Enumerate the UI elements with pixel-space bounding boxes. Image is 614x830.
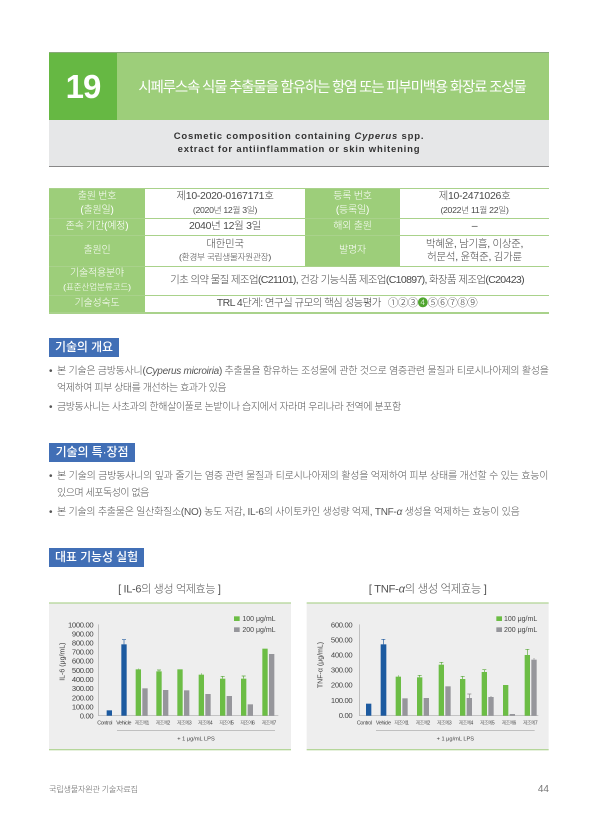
chart: IL-6: 700.00 (72, 648, 93, 657)
filing number label: 출원 번호 (78, 191, 116, 202)
registration number: (2022년 11월 22일) (440, 204, 509, 214)
applicant label: 출원인 (84, 245, 110, 256)
overseas label: 해외 출원 (333, 221, 372, 232)
chart: IL-6: 제조예7 (262, 720, 277, 727)
chart: TNF-alpha: 제조예3 (437, 720, 452, 727)
chart: IL-6: 200 μg/mL (242, 627, 276, 634)
chart: IL-6: 0.00 (80, 711, 93, 720)
term label (49, 219, 145, 235)
chart: IL-6: IL-6 (μg/mL) (59, 643, 66, 681)
chart: IL-6: 500.00 (72, 666, 93, 675)
field (145, 267, 549, 295)
chart: TNF-alpha: 200 μg/mL (504, 627, 537, 634)
chart: TNF-alpha: + 1 μg/mL LPS (437, 737, 474, 743)
maturity label: 기술성숙도 (74, 298, 120, 309)
maturity: TRL 4단계: 연구실 규모의 핵심 성능평가 ①②③❹⑤⑥⑦⑧⑨ (217, 297, 477, 309)
term (145, 219, 305, 235)
chart: TNF-alpha: [ TNF-α의 생성 억제효능 ] (369, 583, 487, 596)
registration number label: (등록일) (336, 204, 369, 216)
chart: IL-6: 1000.00 (68, 620, 93, 629)
chart: IL-6: 100 μg/mL (242, 616, 276, 623)
heading: overview: 기술의 개요 (55, 340, 113, 354)
chart: IL-6: 제조예5 (219, 720, 234, 727)
heading: experiments (49, 548, 144, 567)
chart: TNF-alpha: 300.00 (331, 666, 352, 675)
chart: TNF-alpha: 제조예5 (480, 720, 495, 727)
registration number: 제10-2471026호 (439, 190, 510, 202)
features text: • (49, 507, 52, 518)
term: 2040년 12월 3일 (189, 220, 261, 232)
features text (49, 470, 548, 518)
overseas label (305, 219, 400, 235)
inventors: 박혜윤, 남기흠, 이상준, (426, 238, 523, 250)
page number: 44 (538, 784, 549, 795)
chart: TNF-alpha: 제조예2 (416, 720, 431, 727)
inventors (400, 236, 549, 266)
heading: features (49, 443, 135, 462)
overview text: • (49, 402, 52, 413)
chart: IL-6: 900.00 (72, 629, 93, 638)
applicant (145, 236, 305, 266)
field: 기초 의약 물질 제조업(C21101), 건강 기능식품 제조업(C10897), 화장품 제조업(C20423) (170, 274, 524, 286)
english title: Cosmetic composition containing Cyperus spp. (174, 131, 424, 142)
chart: IL-6: 800.00 (72, 638, 93, 647)
chart: TNF-alpha: 400.00 (331, 651, 352, 660)
applicant label (49, 236, 145, 266)
registration number (400, 189, 549, 218)
chart: IL-6: 200.00 (72, 693, 93, 702)
features line 1: 본 기술의 금방동사니의 잎과 줄기는 염증 관련 물질과 티로시나아제의 활성을 억제하여 피부 상태를 개선할 수 있는 효능이 (57, 471, 548, 482)
overseas (400, 219, 549, 235)
chart: IL-6: 제조예3 (177, 720, 192, 727)
chart: IL-6: 300.00 (72, 684, 93, 693)
features line 2: 있으며 세포독성이 없음 (57, 488, 149, 499)
chart: IL-6 (49, 583, 291, 750)
filing number label (49, 189, 145, 218)
overview line 1: 본 기술은 금방동사니(Cyperus microiria) 추출물을 함유하는 조성물에 관한 것으로 염증관련 물질과 티로시나아제의 활성을 (57, 366, 549, 377)
term label: 존속 기간(예정) (66, 221, 128, 232)
chart: TNF-alpha: Vehicle (376, 721, 391, 727)
chart: IL-6: 제조예1 (135, 720, 150, 727)
chart: IL-6: Vehicle (116, 721, 131, 727)
chart: TNF-alpha: TNF-α (μg/mL) (318, 642, 325, 688)
footer source: 국립생물자원관 기술자료집 (49, 785, 138, 794)
features text: • (49, 471, 52, 482)
applicant: (환경부 국립생물자원관장) (179, 252, 271, 262)
overview text: • (49, 366, 52, 377)
chart: TNF-alpha: 100 μg/mL (504, 616, 537, 623)
chart: TNF-alpha: 600.00 (331, 620, 352, 629)
info table (49, 188, 549, 314)
filing number: (2020년 12월 3일) (193, 204, 257, 214)
field label: (표준산업분류코드) (63, 282, 131, 292)
overview line 2: 억제하여 피부 상태를 개선하는 효과가 있음 (57, 383, 226, 394)
registration number label: 등록 번호 (333, 191, 372, 202)
filing number: 제10-2020-0167171호 (176, 190, 274, 202)
chart: IL-6: 제조예6 (240, 720, 255, 727)
overseas: – (472, 220, 477, 232)
korean title (117, 53, 549, 120)
chart: IL-6: Control (97, 721, 112, 727)
inventor label: 발명자 (339, 245, 366, 256)
field label: 기술적용분야 (70, 268, 124, 279)
patent number: 19 (66, 68, 100, 104)
patent number (49, 53, 117, 120)
chart: IL-6: 제조예2 (156, 720, 171, 727)
registration number label (305, 189, 400, 218)
chart: TNF-alpha: 200.00 (331, 681, 352, 690)
inventors: 허문석, 윤혁준, 김가륜 (427, 251, 522, 263)
overview text (49, 365, 549, 413)
heading: experiments: 대표 기능성 실험 (55, 550, 138, 564)
inventor label (305, 236, 400, 266)
english title (174, 131, 424, 154)
chart: TNF-alpha (306, 582, 549, 750)
maturity label (49, 296, 145, 312)
field label (49, 267, 145, 295)
maturity (145, 296, 549, 312)
chart: TNF-alpha: 500.00 (331, 635, 352, 644)
chart: IL-6: 400.00 (72, 675, 93, 684)
chart: IL-6: [ IL-6의 생성 억제효능 ] (118, 583, 221, 596)
chart: TNF-alpha: 0.00 (339, 711, 352, 720)
features line 3: 본 기술의 추출물은 일산화질소(NO) 농도 저감, IL-6의 사이토카인 생성량 억제, TNF-α 생성을 억제하는 효능이 있음 (57, 507, 520, 518)
heading: overview (49, 338, 119, 357)
filing number label: (출원일) (80, 204, 114, 216)
header band (49, 52, 549, 167)
chart: TNF-alpha: 100.00 (331, 696, 352, 705)
chart: TNF-alpha: 제조예6 (502, 720, 517, 727)
korean title: 시페루스속 식물 추출물을 함유하는 항염 또는 피부미백용 화장료 조성물 (138, 80, 526, 96)
chart: IL-6: 100.00 (72, 702, 93, 711)
chart: TNF-alpha: 제조예4 (459, 720, 474, 727)
chart: TNF-alpha: Control (357, 721, 372, 727)
chart: IL-6: 제조예4 (198, 720, 213, 727)
chart: IL-6: 600.00 (72, 657, 93, 666)
chart: TNF-alpha: 제조예1 (394, 720, 409, 727)
chart: IL-6: + 1 μg/mL LPS (177, 737, 215, 743)
heading: features: 기술의 특·장점 (56, 445, 128, 459)
overview line 3: 금방동사니는 사초과의 한해살이풀로 논밭이나 습지에서 자라며 우리나라 전역에 분포함 (57, 402, 401, 413)
applicant: 대한민국 (206, 238, 244, 250)
english title: extract for antiinflammation or skin whitening (178, 144, 420, 154)
filing number (145, 189, 305, 218)
chart: TNF-alpha: 제조예7 (523, 720, 538, 727)
